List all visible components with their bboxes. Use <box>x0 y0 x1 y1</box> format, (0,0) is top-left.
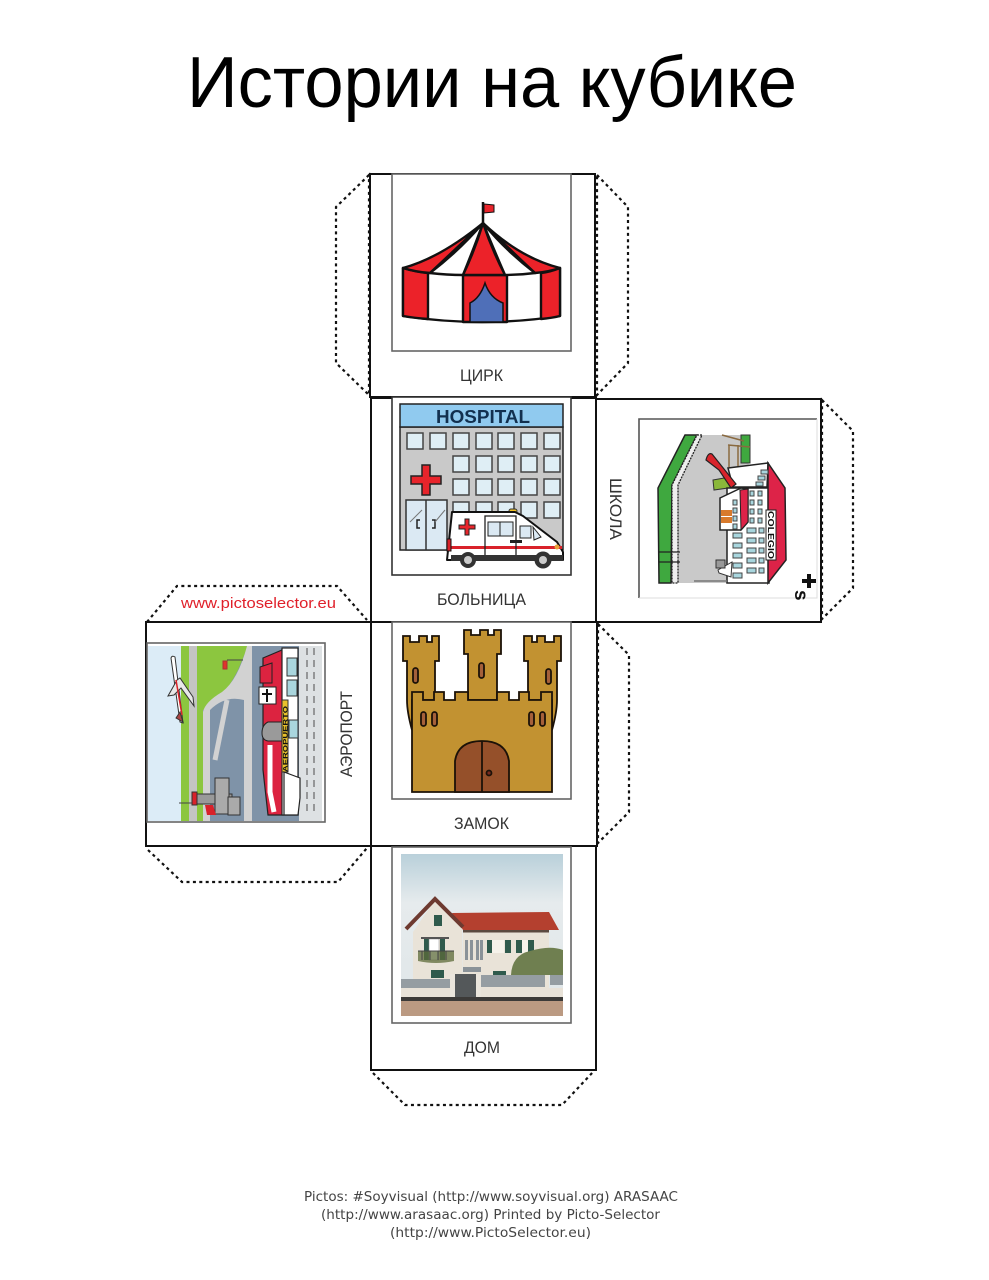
icon: school building: s <box>790 590 811 601</box>
icon: school building: COLEGIO <box>766 511 775 559</box>
icon: airport: AEROPUERTO <box>284 705 290 772</box>
icon: house photo <box>401 854 563 1016</box>
label: school: ШКОЛА <box>606 478 625 541</box>
label: website: www.pictoselector.eu <box>180 596 336 612</box>
footer credits: (http://www.arasaac.org) Printed by Picto-Selector <box>321 1207 660 1223</box>
icon: circus tent <box>403 202 560 322</box>
icon: airport <box>148 646 322 821</box>
panel: school face <box>596 399 821 622</box>
icon: hospital with ambulance <box>400 404 563 568</box>
icon: castle <box>403 630 561 792</box>
label: house: ДОМ <box>464 1038 500 1057</box>
label: hospital: БОЛЬНИЦА <box>437 590 527 609</box>
footer credits: Pictos: #Soyvisual (http://www.soyvisual.org) ARASAAC <box>304 1189 678 1205</box>
icon: school building <box>658 435 816 601</box>
panel: castle face <box>371 622 597 846</box>
glue tabs <box>147 175 853 1105</box>
icon: hospital with ambulance: HOSPITAL <box>436 407 530 427</box>
panel: circus face <box>370 174 595 397</box>
panel: airport face <box>146 596 371 846</box>
label: circus: ЦИРК <box>460 366 503 385</box>
footer credits <box>304 1189 678 1241</box>
panel: house face <box>371 846 596 1070</box>
panel: hospital face <box>371 397 596 622</box>
label: airport: АЭРОПОРТ <box>337 691 356 777</box>
title: Истории на кубике <box>187 43 797 123</box>
footer credits: (http://www.PictoSelector.eu) <box>390 1225 591 1241</box>
label: castle: ЗАМОК <box>454 814 509 833</box>
